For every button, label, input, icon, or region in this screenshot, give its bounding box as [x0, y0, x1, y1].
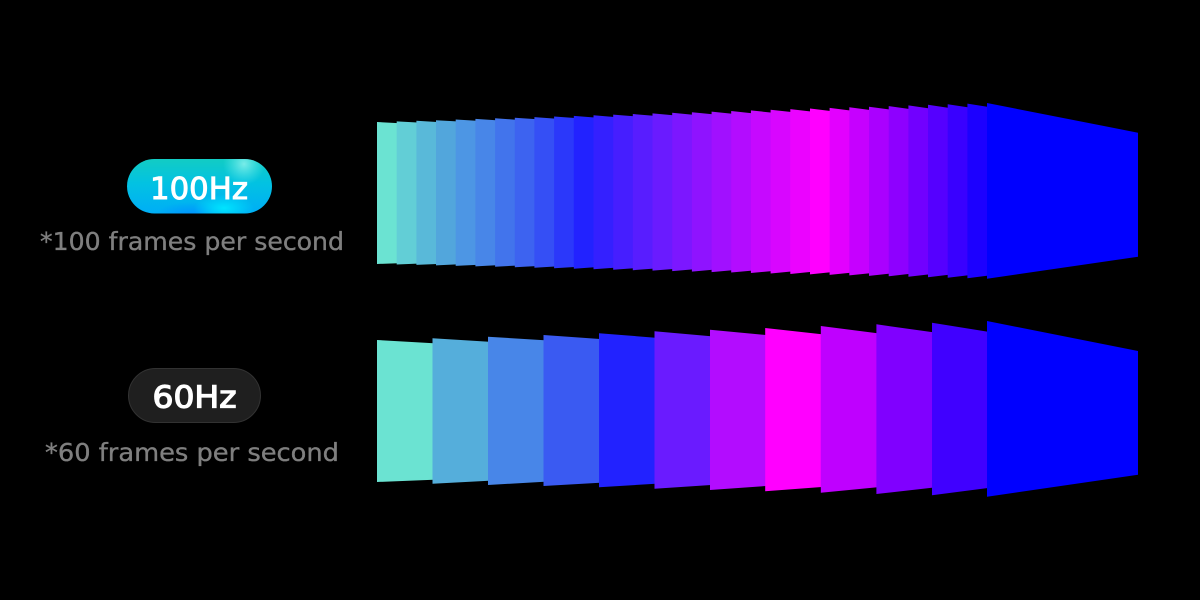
frame 20 [751, 110, 772, 273]
frame 19 [731, 111, 752, 272]
frame 8 [515, 118, 535, 267]
frame 1 [377, 340, 434, 482]
frame 24 [830, 108, 850, 275]
frame 1 [377, 122, 398, 264]
frame 29 [928, 105, 949, 277]
frame 10 [876, 324, 933, 494]
frame 15 [652, 113, 673, 271]
caption: 60 frames per second: *60 frames per second [45, 438, 339, 467]
frame 11 [574, 116, 594, 269]
frame 3 [416, 121, 437, 265]
frame 5 [599, 333, 656, 487]
frame 5 [456, 120, 476, 266]
frame 11 [932, 323, 988, 495]
frame 25 [849, 107, 870, 275]
frame 9 [821, 326, 877, 493]
frame 30 [948, 104, 968, 278]
badge: 60Hz: 60Hz [152, 380, 236, 415]
frame 17 [692, 112, 713, 272]
frame 13 [613, 115, 634, 270]
frame 32 [987, 103, 1138, 279]
frame 21 [771, 110, 791, 274]
frame 22 [790, 109, 811, 274]
frame 12 [987, 321, 1138, 497]
badge: 100Hz [127, 159, 272, 214]
frame 2 [432, 338, 489, 484]
frame 3 [488, 337, 544, 485]
chart: 60Hz frame strip [377, 321, 1138, 497]
frame 16 [672, 113, 693, 271]
frame 4 [544, 335, 600, 486]
frame 27 [889, 106, 909, 276]
frame 26 [869, 107, 890, 276]
frame 18 [712, 112, 732, 272]
frame 10 [554, 116, 575, 268]
frame 14 [633, 114, 654, 270]
frame 6 [475, 119, 496, 266]
frame 7 [710, 330, 766, 490]
badge: 60Hz [128, 368, 260, 422]
frame 9 [534, 117, 555, 268]
frame 6 [654, 331, 711, 489]
frame 2 [397, 121, 417, 265]
caption: 100 frames per second: *100 frames per second [40, 227, 344, 256]
badge: 100Hz: 100Hz [150, 172, 248, 207]
frame 7 [495, 118, 516, 267]
frame 8 [765, 328, 822, 491]
chart: 100Hz frame strip [377, 103, 1138, 279]
frame 12 [594, 115, 614, 269]
frame 28 [908, 105, 929, 277]
frame 31 [967, 104, 988, 278]
frame 4 [436, 120, 457, 265]
frame 23 [810, 108, 831, 274]
